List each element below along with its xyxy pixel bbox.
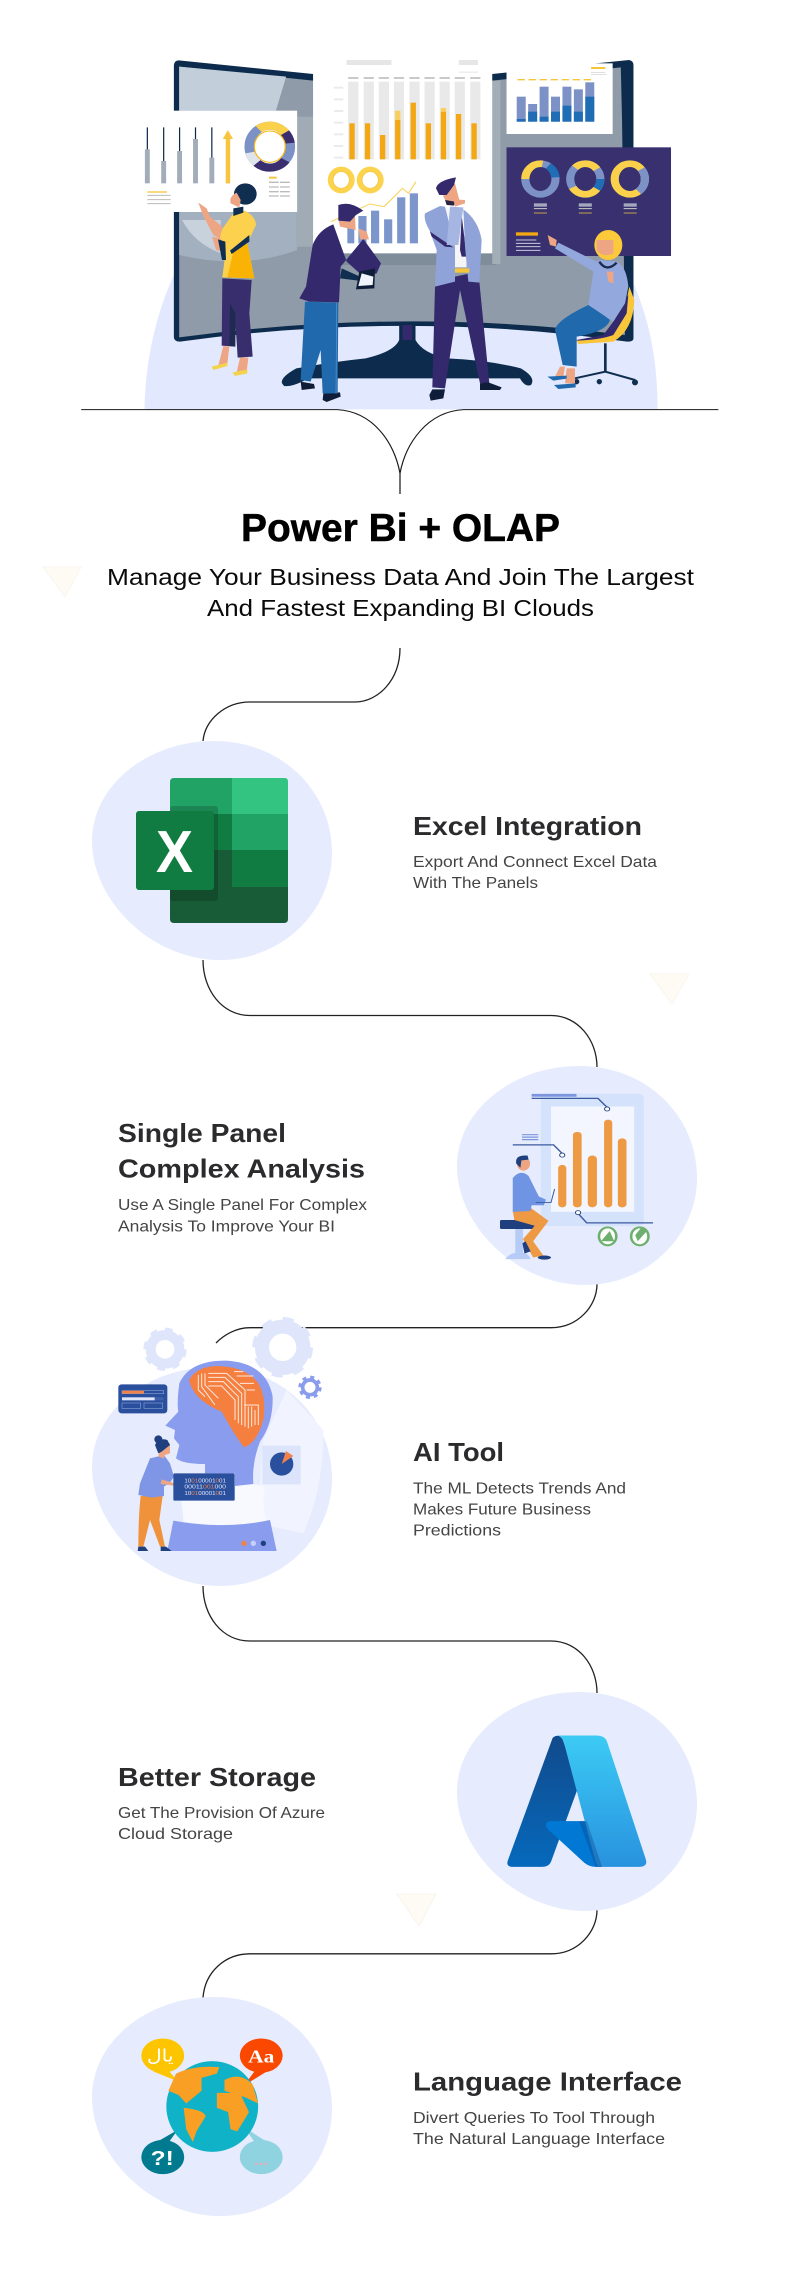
figure: seated woman on chair [547,230,638,389]
step 2 text: Single Panel Complex Analysis: Complex Analysis [118,1154,365,1184]
woman at keyboard [138,1435,177,1551]
step 3 text: AI Tool: Makes Future Business [413,1502,591,1519]
decorative triangle: upper left [43,567,81,597]
connector: AI Tool to Better Storage [203,1586,597,1693]
speech bubbles: يال [147,2047,174,2066]
step 3 text: AI Tool: The ML Detects Trends And [413,1480,626,1498]
step 3 text: AI Tool: Predictions [413,1522,501,1540]
binary code card: 00011001000 [184,1485,226,1491]
center chart panel [313,58,492,253]
decorative triangle: middle [397,1894,436,1926]
step 4 text: Better Storage: Better Storage [118,1762,316,1792]
figures: standing man and seated woman [425,177,638,401]
globe [166,2061,258,2152]
step 5 text: Language Interface: Language Interface [413,2067,682,2097]
figure: standing man in blue suit [425,177,502,401]
binary code card [173,1473,235,1501]
binary code card: 100100001001 [184,1478,226,1484]
step 4 illustration: Azure logo [457,1692,697,1911]
chart board [513,1093,653,1245]
neck [173,1473,266,1525]
decorative triangle: right [650,974,689,1004]
step 2 illustration: analyst with bar chart [457,1066,697,1285]
hero background blob [144,273,658,409]
excel logo: X [156,819,193,885]
step 5 text: Language Interface: Divert Queries To Tool Through [413,2110,655,2127]
step 1 text: Excel Integration [413,811,657,892]
circle background [457,1692,697,1911]
step 5 text: Language Interface [413,2067,682,2148]
step 1 text: Excel Integration: Excel Integration [413,811,642,841]
hero illustration: dashboard monitor [81,58,718,494]
step 3 illustration: AI head with brain circuit [92,1321,332,1586]
subtitle [107,564,695,621]
subtitle: Manage Your Business Data And Join The Largest [107,564,695,590]
head silhouette [165,1361,273,1486]
step 2 text: Single Panel Complex Analysis: Analysis To Improve Your BI [118,1218,335,1236]
connector: Better Storage to Language Interface [203,1910,597,1998]
binary code card: 100100001001 [184,1491,226,1497]
step 2 text: Single Panel Complex Analysis: Use A Single Panel For Complex [118,1197,367,1214]
excel logo [136,778,288,923]
pedestal [167,1520,277,1551]
splitting line from hero to title [81,410,718,494]
gears [146,1321,320,1397]
step 3 text: AI Tool [413,1437,626,1540]
subtitle: And Fastest Expanding BI Clouds [207,595,594,621]
connector: title to Excel [203,648,400,741]
speech bubbles: Aa [248,2047,274,2067]
connector: Excel to Single Panel [203,960,597,1067]
monitor [174,60,633,386]
seated person on stool [500,1155,555,1260]
figure: leaning man with tablet [299,204,381,402]
circle background [457,1066,697,1285]
pie chart card [262,1446,301,1484]
step 2 text: Single Panel Complex Analysis [118,1118,367,1236]
circle background [92,1367,332,1586]
glow beam behind head [257,1390,323,1533]
left chart panel [135,111,297,212]
figure: woman in yellow jacket [198,183,257,376]
progress card [118,1384,167,1413]
step 1 text: Excel Integration: Export And Connect Excel Data [413,854,657,871]
step 4 text: Better Storage [118,1762,325,1843]
figures: woman in yellow jacket and leaning man [198,183,381,402]
step 5 text: Language Interface: The Natural Language Interface [413,2131,665,2148]
circle background [92,1997,332,2216]
step 1: Excel Integration icon [92,741,332,960]
step 4 text: Better Storage: Cloud Storage [118,1826,233,1843]
connector: Single Panel to AI Tool [216,1284,597,1343]
step 4 text: Better Storage: Get The Provision Of Azure [118,1805,325,1822]
speech bubbles: ... [254,2153,268,2169]
speech bubbles: ?! [151,2147,174,2170]
step 1 text: Excel Integration: With The Panels [413,875,538,892]
title: Power Bi + OLAP [241,507,560,550]
continents [168,2067,258,2142]
step 2 text: Single Panel Complex Analysis: Single Panel [118,1118,286,1148]
step 3 text: AI Tool: AI Tool [413,1437,504,1467]
dark donut panel [507,147,671,256]
top right chart panel [507,63,613,134]
brain with circuit lines [189,1366,264,1447]
circle background [92,741,332,960]
step 5 illustration: globe with speech bubbles [92,1997,332,2216]
speech bubbles [141,2038,283,2174]
